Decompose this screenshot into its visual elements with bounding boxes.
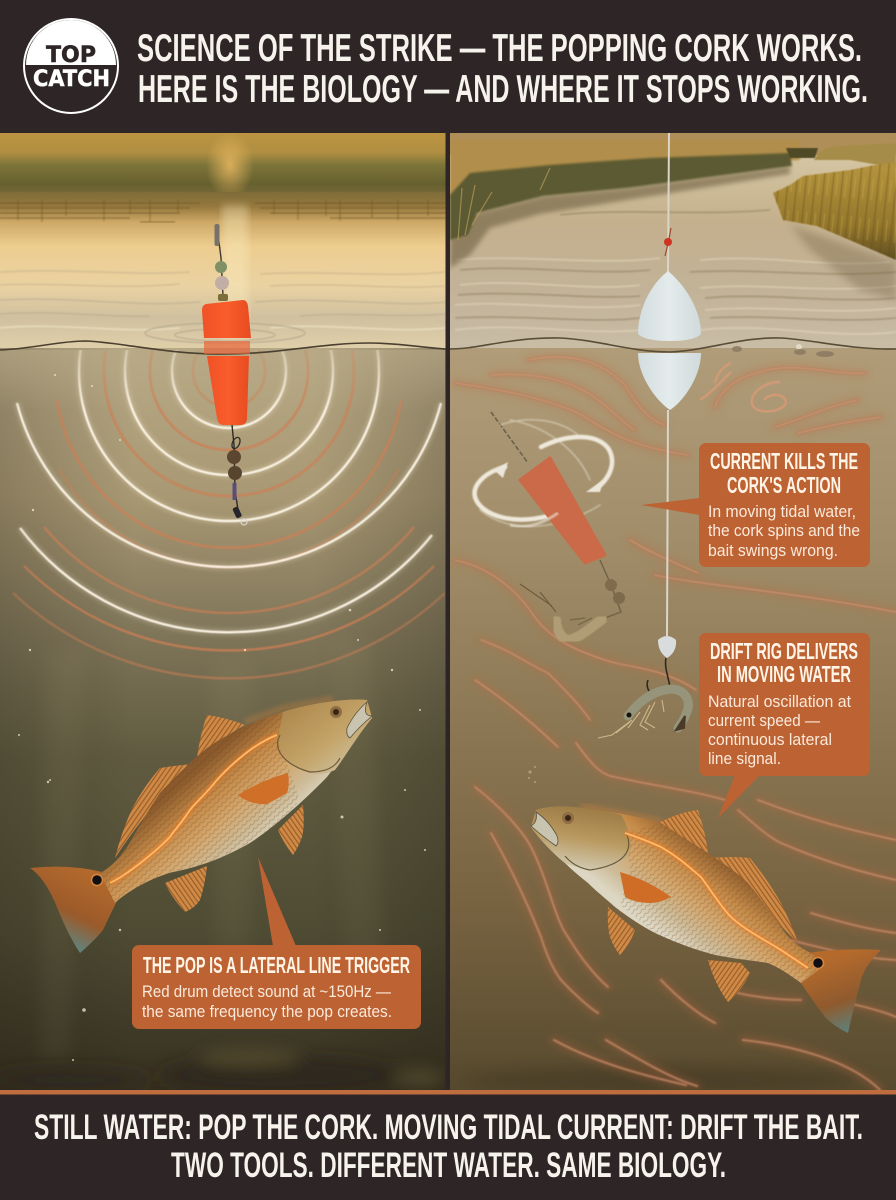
swirl front [510, 513, 558, 526]
underwater [0, 348, 446, 1090]
pointer [718, 775, 760, 818]
tail fin [30, 867, 116, 953]
panel: moving water [450, 133, 896, 1094]
fish glow [245, 699, 333, 722]
logo word top: TOP [46, 43, 96, 68]
cork reflection [204, 341, 250, 354]
badge top half [26, 20, 116, 65]
riverbed shadows [172, 1046, 443, 1090]
shrimp tail [676, 716, 685, 730]
red drum: right [531, 806, 881, 1033]
body [100, 700, 372, 903]
head [278, 700, 372, 774]
callout line three: continuous lateral [708, 731, 832, 749]
callout line two: current speed — [708, 712, 820, 730]
upper leader [491, 412, 528, 463]
callout box [699, 633, 870, 776]
particles [18, 374, 426, 1061]
reflection bands [0, 203, 446, 222]
scales [620, 823, 825, 983]
lip [347, 702, 372, 738]
pale core lines [455, 357, 896, 1090]
ring glow [14, 364, 444, 636]
hanging weight [658, 636, 676, 658]
eddy spiral [700, 363, 786, 411]
header bar [0, 0, 896, 133]
right bank reeds [773, 163, 896, 260]
callout line two: the cork spins and the [708, 522, 860, 540]
eye [626, 712, 632, 718]
sun reflection [222, 205, 248, 340]
swung beads [600, 560, 625, 618]
anal and pelvic fins [165, 805, 304, 912]
drift rig line [667, 133, 669, 636]
panel edge shade [0, 348, 446, 1090]
water surface line [0, 341, 446, 354]
riverbed shade [460, 1066, 860, 1094]
callout line one: In moving tidal water, [708, 503, 856, 521]
bubbles [528, 766, 536, 783]
right grass bank [773, 163, 896, 260]
badge disc [24, 19, 118, 113]
light rays [55, 1038, 56, 1040]
hanging shrimp [598, 689, 688, 738]
orange rings [12, 350, 445, 680]
cork below surface [638, 353, 701, 410]
swirl strokes [475, 420, 612, 526]
spinning cork [475, 412, 625, 640]
logo badge [24, 19, 118, 113]
golden marsh [450, 140, 800, 200]
callout line three: bait swings wrong. [708, 542, 838, 560]
sound wave rings [0, 350, 445, 680]
water ripples [455, 210, 896, 334]
red drum: left [30, 699, 372, 953]
callout line four: line signal. [708, 750, 781, 768]
footer accent rule [0, 1090, 896, 1094]
callout: current kills action [641, 443, 870, 567]
cork above surface [638, 271, 701, 341]
white cork [638, 271, 701, 410]
pectoral fin [620, 872, 671, 903]
orange current lines [455, 357, 896, 1090]
callout heading: THE POP IS A LATERAL LINE TRIGGER [143, 952, 410, 978]
white rings [16, 350, 442, 634]
marsh horizon [0, 133, 446, 192]
anal and pelvic fins [608, 907, 750, 1002]
footer bar [0, 1094, 896, 1200]
upper right marsh [814, 143, 896, 168]
callout line one: Red drum detect sound at ~150Hz — [142, 983, 391, 1001]
gill [565, 833, 629, 870]
lower rig [227, 425, 247, 525]
dorsal fins [658, 810, 798, 943]
lip [531, 812, 558, 846]
tail fin [801, 949, 881, 1033]
swirl arrowheads [494, 462, 603, 492]
surface ripples [0, 271, 445, 330]
right bank reflection [790, 225, 896, 300]
faded cork [520, 458, 605, 563]
gill [278, 735, 340, 772]
pointer [258, 857, 296, 946]
callout box [699, 443, 870, 567]
ring surface fade [0, 350, 445, 401]
cork below surface [207, 356, 249, 425]
callout line two: the same frequency the pop creates. [142, 1003, 392, 1021]
reed blades [458, 168, 550, 240]
scales [100, 712, 300, 903]
lateral line [625, 833, 808, 968]
head [531, 807, 631, 869]
tail spot [92, 874, 102, 886]
bobber stop bead [664, 228, 672, 256]
pointer [641, 498, 700, 515]
hook [647, 658, 670, 692]
ripples around cork [145, 323, 305, 343]
panel: still water [0, 131, 446, 1093]
lateral line [110, 735, 277, 883]
body [531, 807, 825, 983]
bank reflection [450, 166, 790, 268]
panel divider [446, 133, 450, 1090]
callout: pop trigger [132, 857, 421, 1029]
cork top rig [214, 224, 229, 301]
shrimp body [628, 689, 688, 728]
callout box [132, 945, 421, 1029]
logo word catch: CATCH [33, 67, 110, 92]
channel gap [786, 148, 818, 158]
far marsh [450, 133, 896, 173]
callout line one: Natural oscillation at [708, 693, 851, 711]
fish glow [581, 806, 661, 821]
water surface line [450, 338, 896, 352]
cork above surface [202, 300, 251, 338]
eye [330, 706, 342, 718]
legs and antennae [598, 700, 664, 738]
underwater [450, 348, 896, 1090]
sunset shaft [208, 138, 252, 192]
tail spot [812, 958, 824, 968]
current lines [455, 357, 896, 1090]
eye [562, 812, 574, 824]
surface debris [732, 344, 834, 357]
dark grass band [450, 153, 792, 240]
surface water [0, 192, 446, 352]
swung shrimp [520, 584, 604, 640]
tidal water [450, 155, 896, 352]
dorsal fins [115, 715, 245, 858]
current glow [455, 357, 896, 1090]
callout: drift rig [699, 633, 870, 818]
pectoral fin [238, 773, 289, 804]
grass reflection streaks [18, 200, 428, 222]
popping cork [202, 224, 251, 525]
